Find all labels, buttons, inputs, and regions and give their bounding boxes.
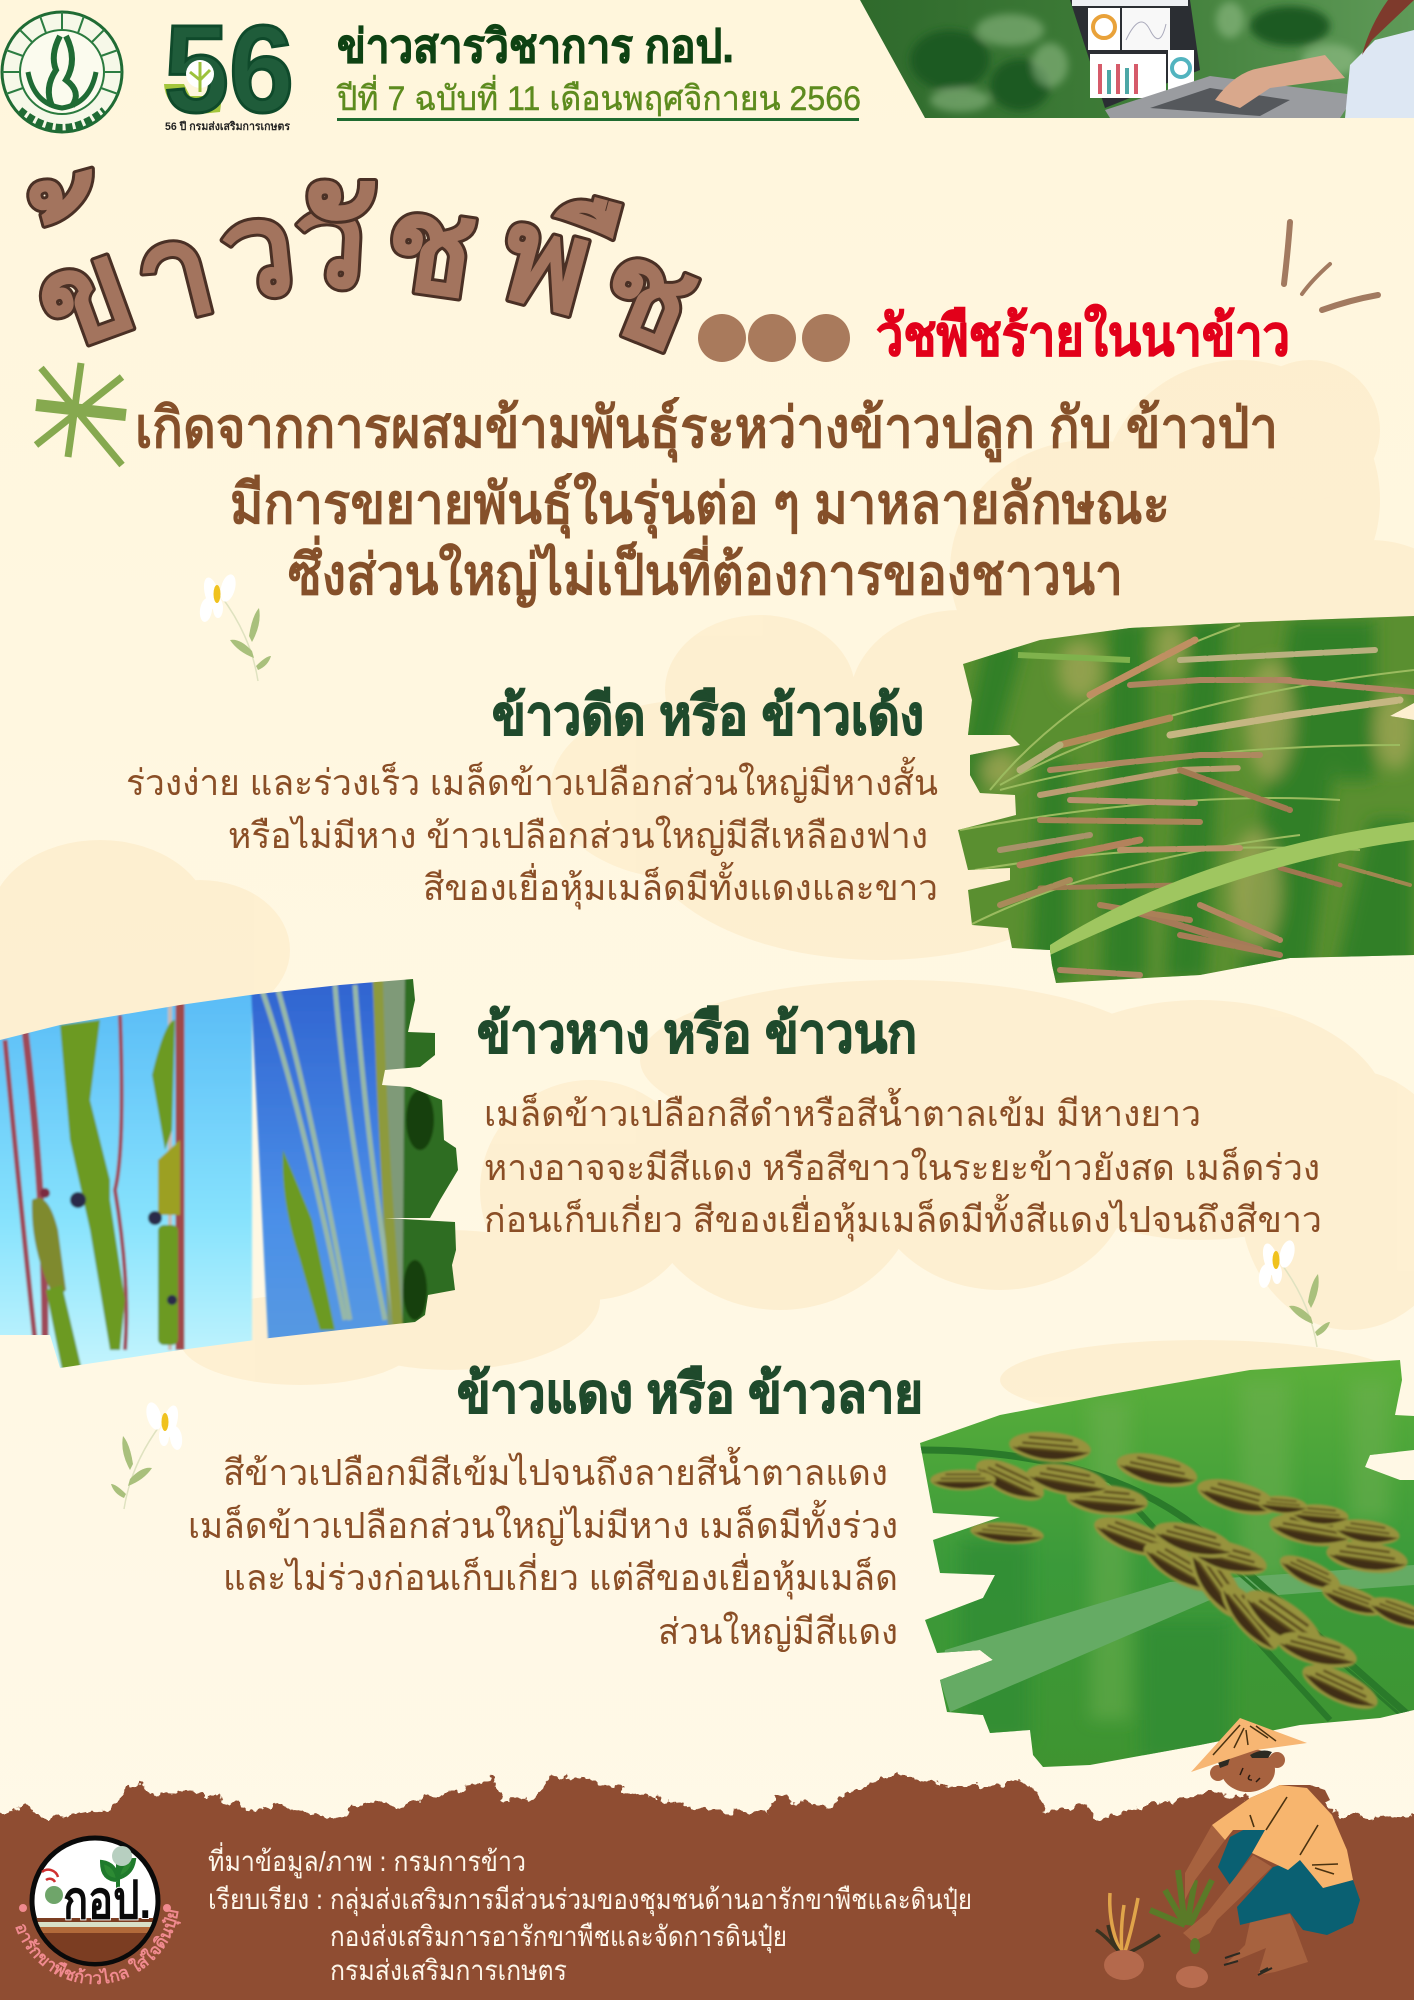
decorative background clouds [0, 360, 1414, 1420]
main title: curved word: ้ [25, 167, 148, 398]
main title: curved word: ว [289, 165, 371, 316]
intro text [135, 396, 1278, 608]
header: department seal [2, 12, 122, 132]
section 1 body: ร่วงง่าย และร่วงเร็ว เมล็ดข้าวเปลือกส่วนใหญ่มีหางสั้น [126, 756, 938, 803]
footer logo: อารักขาพืชก้าวไกล ใส่ใจดินปุ๋ย [15, 1910, 181, 1984]
icon: green star [36, 363, 126, 465]
decorative flower [198, 573, 271, 681]
main title: curved word: า [120, 192, 228, 353]
main title: curved word [16, 165, 717, 398]
section 1 body [126, 756, 938, 910]
section 2 heading: ข้าวหาง หรือ ข้าวนก [477, 1004, 917, 1064]
section 3 heading: ข้าวแดง หรือ ข้าวลาย [457, 1364, 923, 1424]
header: newsletter title: ข่าวสารวิชาการ กอป. [337, 20, 734, 72]
footer logo: กอป. [63, 1872, 151, 1930]
section 2 body: หางอาจจะมีสีแดง หรือสีขาวในระยะข้าวยังสด เมล็ดร่วง [484, 1145, 1320, 1188]
section 3 body: และไม่ร่วงก่อนเก็บเกี่ยว แต่สีของเยื่อหุ้มเมล็ด [223, 1553, 898, 1600]
section 1 body: สีของเยื่อหุ้มเมล็ดมีทั้งแดงและขาว [423, 861, 938, 910]
photo 3: ripening rice [915, 1355, 1414, 1775]
header: 56 years logo: 56 [164, 1, 294, 139]
accent strokes [1284, 222, 1378, 310]
header photo: laptop in field [860, 0, 1414, 118]
title dots [698, 314, 850, 362]
main title: curved word: ข [16, 211, 151, 380]
footer credits: กรมส่งเสริมการเกษตร [330, 1955, 567, 1986]
photo 1: rice panicles [950, 610, 1414, 990]
intro text: มีการขยายพันธุ์ในรุ่นต่อ ๆ มาหลายลักษณะ [230, 471, 1170, 539]
intro text: ซึ่งส่วนใหญ่ไม่เป็นที่ต้องการของชาวนา [288, 535, 1123, 608]
footer credits: เรียบเรียง : [208, 1884, 323, 1915]
section 3 body: เมล็ดข้าวเปลือกส่วนใหญ่ไม่มีหาง เมล็ดมีทั้งร่วง [188, 1499, 898, 1546]
section 1 body: หรือไม่มีหาง ข้าวเปลือกส่วนใหญ่มีสีเหลืองฟาง [228, 815, 928, 856]
illustration: farmer planting rice [1150, 1718, 1360, 1988]
subtitle: red: วัชพืชร้ายในนาข้าว [876, 303, 1290, 367]
section 2 body: เมล็ดข้าวเปลือกสีดำหรือสีน้ำตาลเข้ม มีหางยาว [484, 1087, 1201, 1134]
footer credits: กองส่งเสริมการอารักขาพืชและจัดการดินปุ๋ย [330, 1921, 787, 1954]
main title: curved word: ื [525, 182, 633, 341]
footer credits [208, 1842, 972, 1986]
main title: curved word: ช [376, 168, 485, 326]
illustration: small rice seedling [1096, 1893, 1160, 1980]
intro text: เกิดจากการผสมข้ามพันธุ์ระหว่างข้าวปลูก กับ ข้าวป่า [135, 396, 1278, 463]
footer credits: ที่มาข้อมูล/ภาพ : กรมการข้าว [208, 1842, 526, 1879]
section 3 body [188, 1446, 898, 1652]
main title: curved word: ว [213, 174, 302, 327]
section 2 body: ก่อนเก็บเกี่ยว สีของเยื่อหุ้มเมล็ดมีทั้งสีแดงไปจนถึงสีขาว [484, 1193, 1322, 1242]
header: issue line: ปีที่ 7 ฉบับที่ 11 เดือนพฤศจิกายน 2566 [336, 75, 861, 118]
main title: curved word: ช [579, 210, 717, 380]
footer credits: กลุ่มส่งเสริมการมีส่วนร่วมของชุมชนด้านอารักขาพืชและดินปุ๋ย [330, 1884, 972, 1917]
decorative flower [1257, 1239, 1330, 1347]
section 2 body [484, 1087, 1322, 1242]
decorative flower [111, 1401, 184, 1509]
header: 56 years logo: 56 ปี กรมส่งเสริมการเกษตร [165, 120, 290, 133]
photo 2: bearded rice against sky [0, 970, 480, 1380]
footer logo [15, 1836, 181, 1984]
footer soil band [0, 1773, 1414, 2000]
main title: curved word: ั [308, 166, 376, 356]
main title: curved word: พ [485, 178, 607, 343]
section 3 body: ส่วนใหญ่มีสีแดง [658, 1611, 898, 1652]
section 3 body: สีข้าวเปลือกมีสีเข้มไปจนถึงลายสีน้ำตาลแดง [223, 1446, 888, 1493]
section 1 heading: ข้าวดีด หรือ ข้าวเด้ง [492, 686, 924, 746]
